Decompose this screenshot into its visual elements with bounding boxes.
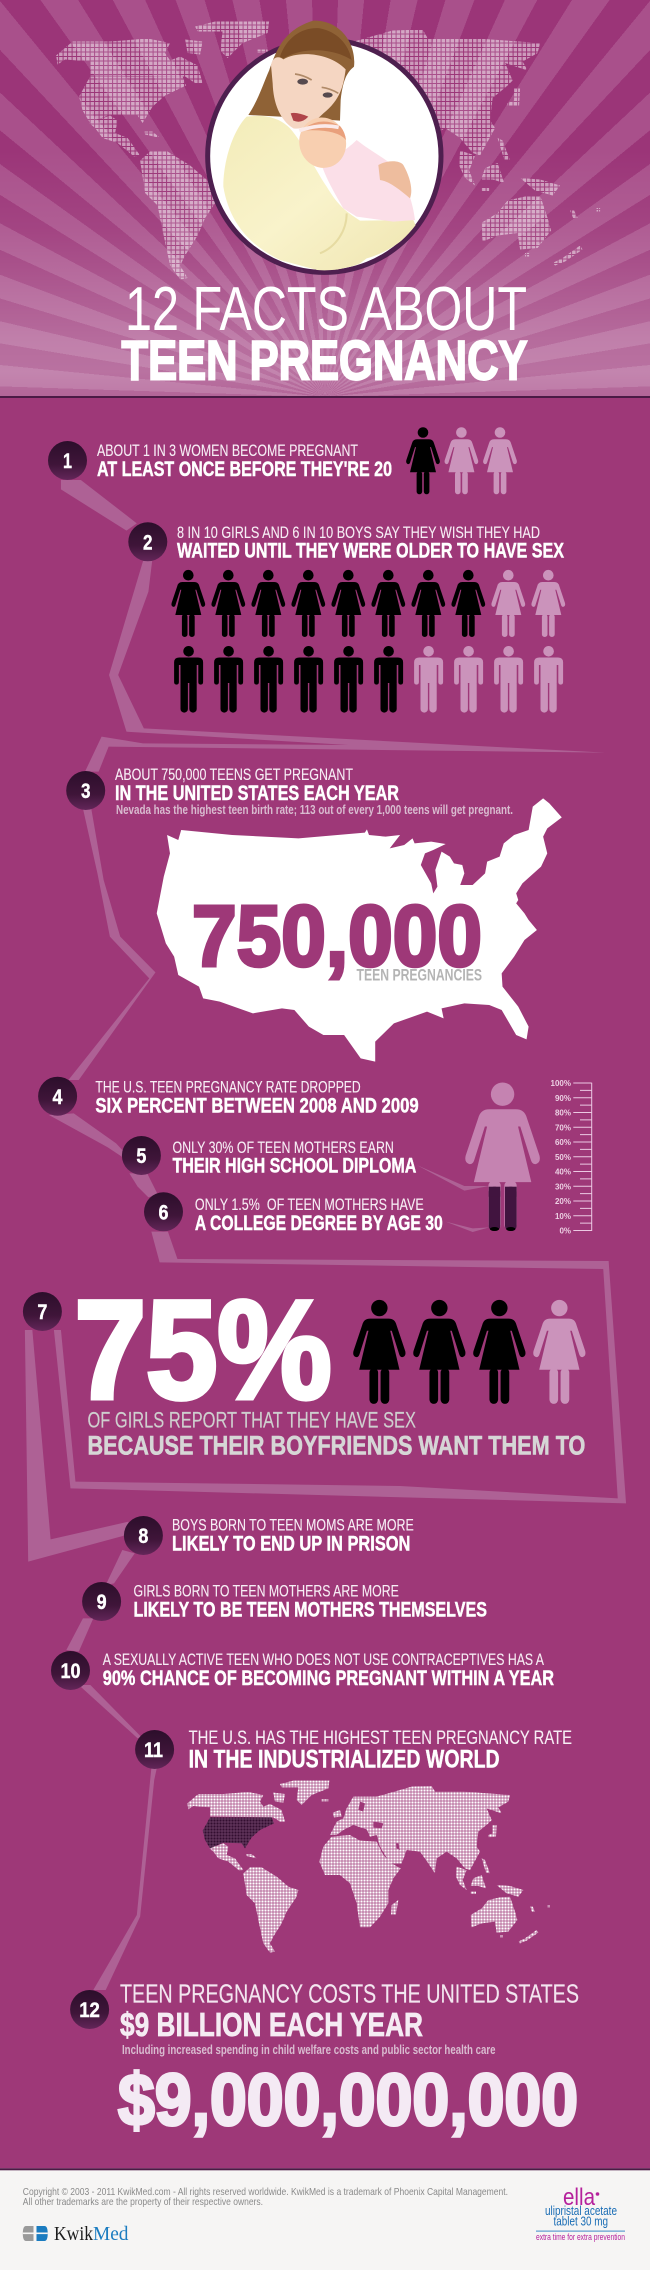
ribbon 5 to 6: [129, 1173, 158, 1197]
badge 11: [135, 1730, 174, 1769]
KwikMed logo: Kwik: [54, 2223, 93, 2245]
header divider: [0, 396, 650, 398]
number 7: 7: [37, 1301, 47, 1324]
copyright text: Copyright © 2003 - 2011 KwikMed.com - All rights reserved worldwide. KwikMed is a trademark of Phoenix Capital Management.: [23, 2186, 508, 2198]
ribbon 11 to 12: [93, 1768, 157, 1990]
sweater arm fold: [320, 213, 347, 253]
panel: fact 8: [124, 1516, 414, 1556]
badge 1: [48, 441, 87, 480]
panel: fact 5: [122, 1136, 416, 1178]
text line 1: ABOUT 750,000 TEENS GET PREGNANT: [115, 765, 353, 784]
badge 3: [66, 771, 105, 810]
panel: footer: [0, 2168, 650, 2270]
text line 2: THEIR HIGH SCHOOL DIPLOMA: [172, 1155, 416, 1178]
percentage scale: 60%: [555, 1138, 571, 1147]
badge 7: [23, 1292, 62, 1331]
badge 2: [128, 522, 167, 561]
blanket: [322, 140, 415, 222]
text line 2: IN THE INDUSTRIALIZED WORLD: [189, 1747, 500, 1774]
ribbon 8 to 9: [106, 1550, 135, 1585]
badge 4: [38, 1077, 77, 1116]
number 1: 1: [63, 450, 72, 473]
panel: fact 7: [23, 1271, 585, 1460]
text line 2: A COLLEGE DEGREE BY AGE 30: [195, 1212, 443, 1235]
text line 2: AT LEAST ONCE BEFORE THEY'RE 20: [97, 458, 392, 481]
percentage scale: 30%: [555, 1182, 571, 1191]
text line 1: ONLY 1.5% OF TEEN MOTHERS HAVE: [195, 1195, 424, 1214]
75% figure: 75%: [75, 1271, 332, 1428]
KwikMed logo: [23, 2223, 128, 2245]
ribbon 4 to 5: [49, 1113, 129, 1158]
text line 1: ONLY 30% OF TEEN MOTHERS EARN: [172, 1138, 394, 1157]
footer background: [0, 2168, 650, 2270]
percentage scale: 40%: [555, 1168, 571, 1176]
dotted world map with US highlighted: [187, 1781, 550, 1953]
ella logo: ulipristal acetate: [545, 2203, 617, 2218]
percentage scale: 100%: [551, 1079, 571, 1088]
percentage scale: 0%: [559, 1226, 571, 1236]
baby headband: [299, 126, 339, 131]
750,000 figure: 750,000: [192, 889, 482, 985]
panel: fact 12: [70, 1979, 579, 2141]
icons: 8 of 10 girls: [171, 570, 565, 637]
number 6: 6: [158, 1202, 168, 1224]
text line 1: OF GIRLS REPORT THAT THEY HAVE SEX: [88, 1408, 416, 1433]
number 2: 2: [143, 532, 152, 554]
panel: fact 9: [82, 1582, 487, 1622]
connector ribbons: [25, 480, 626, 1990]
text line 2: IN THE UNITED STATES EACH YEAR: [115, 782, 399, 805]
icons: 3 of 4 girls: [353, 1300, 585, 1404]
icons: 1 of 3 women: [406, 427, 517, 494]
percentage scale: 10%: [555, 1212, 571, 1221]
number 10: 10: [60, 1660, 80, 1683]
text line 2: LIKELY TO END UP IN PRISON: [172, 1533, 410, 1556]
number 4: 4: [52, 1086, 63, 1109]
ribbon 9 to 10: [66, 1618, 93, 1652]
eyes and mouth: [291, 74, 338, 122]
badge 9: [82, 1582, 121, 1621]
panel: fact 3: [66, 765, 562, 1062]
badge 6: [144, 1192, 183, 1231]
text line 1: GIRLS BORN TO TEEN MOTHERS ARE MORE: [134, 1582, 399, 1601]
mother's hand: [378, 161, 411, 198]
baby head: [294, 112, 352, 173]
percentage scale: 80%: [555, 1108, 571, 1118]
sweater: [223, 116, 416, 272]
ribbon 3 to 4: [68, 808, 155, 1080]
panel: fact 10: [51, 1650, 554, 1690]
face: [271, 54, 346, 129]
badge 10: [51, 1651, 90, 1690]
title line 1: 12 FACTS ABOUT: [125, 275, 527, 344]
text line 1: 8 IN 10 GIRLS AND 6 IN 10 BOYS SAY THEY WISH THEY HAD: [177, 523, 540, 542]
hair: [248, 21, 354, 121]
large woman figure with legs filled: [465, 1082, 540, 1231]
badge 8: [124, 1516, 163, 1555]
panel: fact 4: [38, 1077, 419, 1118]
teen pregnancies caption: TEEN PREGNANCIES: [356, 967, 482, 985]
title line 2: TEEN PREGNANCY: [122, 328, 528, 391]
text line 1: THE U.S. TEEN PREGNANCY RATE DROPPED: [95, 1078, 361, 1097]
panel: fact 2: [128, 522, 565, 713]
copyright text: [23, 2186, 508, 2208]
number 9: 9: [97, 1591, 107, 1614]
number 12: 12: [79, 1999, 100, 2022]
number 11: 11: [144, 1739, 163, 1762]
footer divider: [0, 2168, 650, 2170]
copyright text: All other trademarks are the property of their respective owners.: [23, 2196, 263, 2208]
panel: fact 1: [48, 427, 517, 494]
ribbon 1 to 2: [61, 480, 137, 531]
oval frame: [208, 40, 441, 272]
text line 2: $9 BILLION EACH YEAR: [120, 2006, 423, 2043]
world map header dots: [56, 22, 600, 280]
ella logo: ella: [563, 2184, 596, 2211]
percentage scale: 70%: [555, 1123, 571, 1132]
percentage scale: 90%: [555, 1094, 571, 1103]
icons: 6 of 10 boys: [174, 646, 563, 713]
baby hair: [301, 121, 346, 140]
panel: fact 11: [135, 1728, 572, 1953]
text line 2: LIKELY TO BE TEEN MOTHERS THEMSELVES: [134, 1599, 487, 1622]
panel: fact 6: [144, 1192, 443, 1235]
header sunburst background: [0, 0, 650, 397]
percentage scale: 50%: [555, 1153, 571, 1162]
$9,000,000,000 figure: $9,000,000,000: [118, 2060, 578, 2141]
photo: mother and baby in oval: [208, 21, 441, 272]
KwikMed logo: Med: [93, 2223, 128, 2245]
percentage scale: [551, 1079, 592, 1236]
number 8: 8: [138, 1525, 149, 1548]
text note: Including increased spending in child welfare costs and public sector health care: [122, 2043, 496, 2057]
header light fade: [0, 0, 650, 397]
hair highlight: [280, 28, 352, 60]
ribbon 10 to 11: [79, 1685, 141, 1738]
text line 1: ABOUT 1 IN 3 WOMEN BECOME PREGNANT: [97, 441, 358, 460]
ella logo: [536, 2184, 625, 2243]
ella logo: tablet 30 mg: [554, 2214, 608, 2229]
text line 2: SIX PERCENT BETWEEN 2008 AND 2009: [95, 1095, 419, 1118]
US map: [157, 798, 562, 1062]
panel: header: [0, 21, 650, 398]
leader lines to figure: [417, 1165, 489, 1232]
number 3: 3: [81, 780, 90, 803]
ribbon 2 to 3: [85, 561, 605, 772]
number 5: 5: [136, 1145, 147, 1168]
text line 1: BOYS BORN TO TEEN MOMS ARE MORE: [172, 1516, 414, 1535]
ribbon 6 to frame around fact 7: [54, 1232, 626, 1503]
percentage scale: 20%: [555, 1197, 571, 1206]
ribbon 7 to 8: [25, 1330, 129, 1562]
text note: Nevada has the highest teen birth rate; 113 out of every 1,000 teens will get pregnant.: [116, 803, 513, 817]
badge 5: [122, 1136, 161, 1175]
badge 12: [70, 1990, 109, 2029]
